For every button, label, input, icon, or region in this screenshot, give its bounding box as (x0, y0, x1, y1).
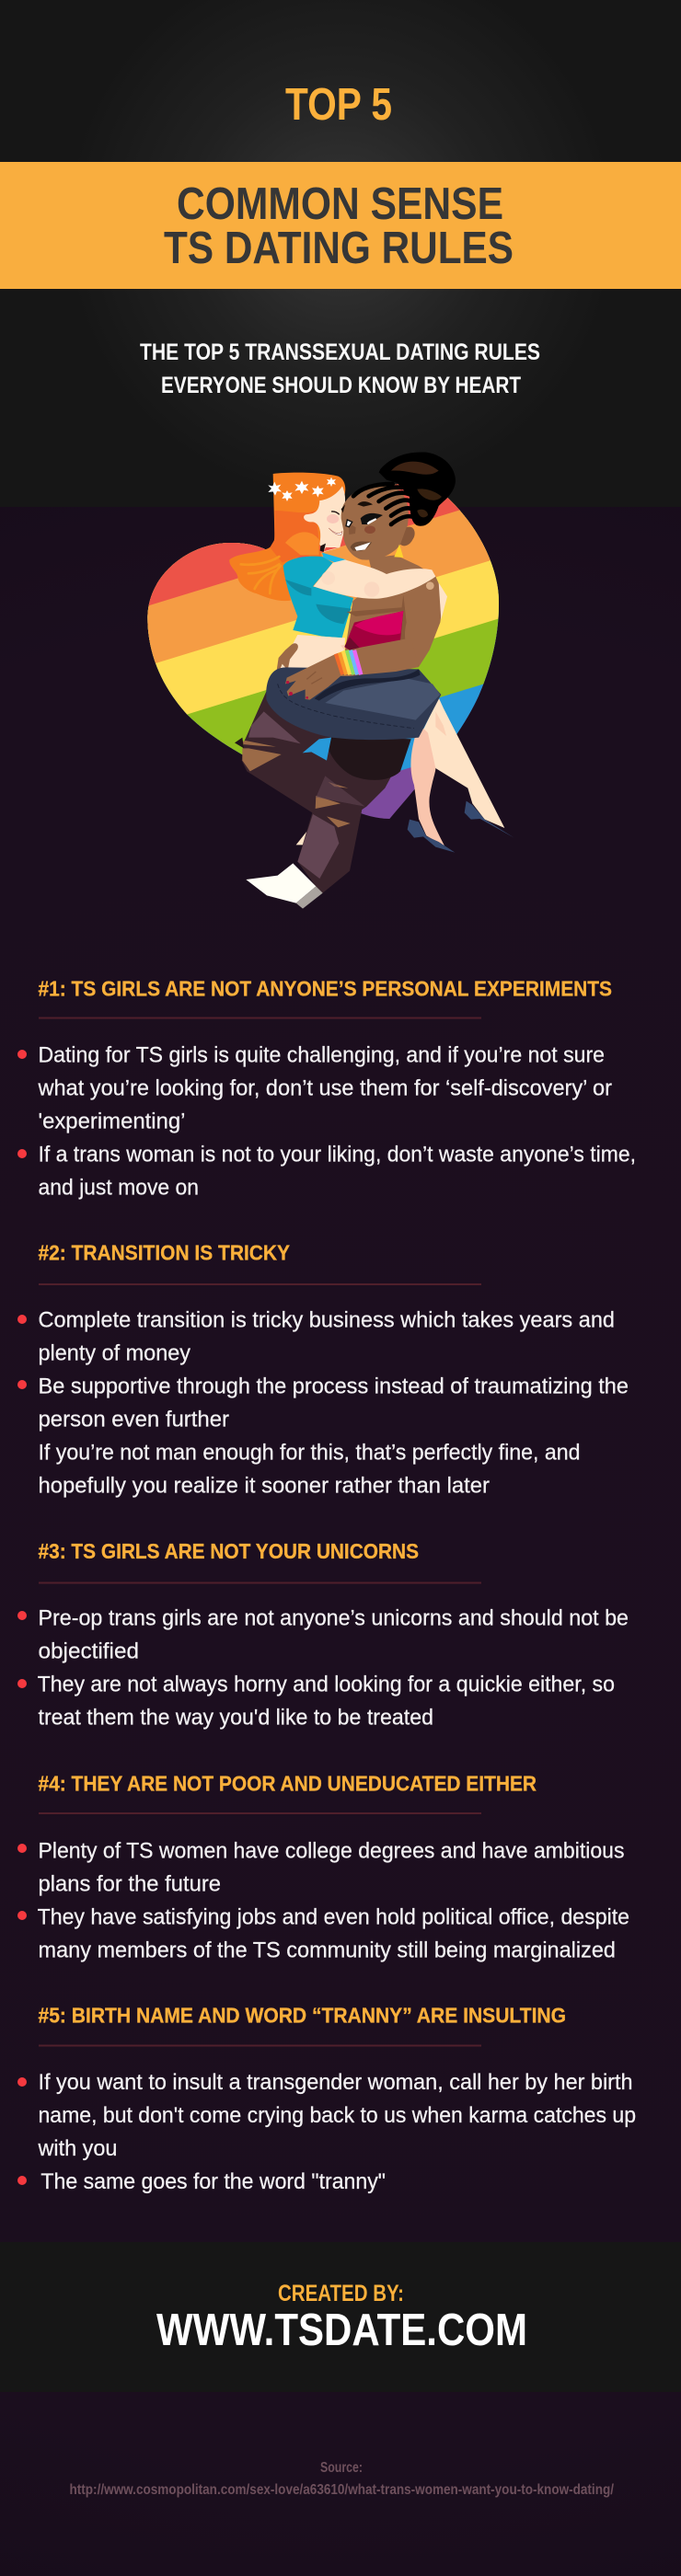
created by label: CREATED BY: (278, 2281, 404, 2306)
section 3 (17, 1539, 629, 1730)
section 5 (17, 2004, 636, 2194)
bullet list 2: hopefully you realize it sooner rather than later (39, 1474, 490, 1498)
magenta top (344, 611, 403, 650)
bullet list 2 (17, 1308, 629, 1498)
dark forearm and hand (285, 638, 419, 700)
bullet list 4 (17, 1838, 629, 1963)
bullet list 1: 'experimenting’ (39, 1110, 186, 1133)
bullet list 3: treat them the way you'd like to be treated (39, 1706, 433, 1730)
footer band (0, 2242, 681, 2392)
blue crop top (283, 553, 353, 638)
white ankle boot (246, 863, 323, 909)
heading: top 5: TOP 5 (285, 80, 392, 130)
bullet list 1: If a trans woman is not to your liking, don’t waste anyone’s time, (39, 1143, 636, 1167)
bullet list 1 (17, 1043, 636, 1200)
bullet list 4: plans for the future (39, 1871, 221, 1897)
heading 4: #4: THEY ARE NOT POOR AND UNEDUCATED EITHER (39, 1772, 537, 1796)
bullet list 5: The same goes for the word "tranny" (40, 2169, 386, 2194)
flower crown (268, 477, 336, 501)
peach midriff (279, 635, 345, 684)
pale legs and navy heels (296, 697, 514, 853)
title text (164, 179, 514, 273)
divider (39, 1283, 481, 1285)
bullet list 3: objectified (39, 1639, 139, 1663)
subtitle: EVERYONE SHOULD KNOW BY HEART (161, 373, 521, 398)
heading 5: #5: BIRTH NAME AND WORD “TRANNY” ARE INSULTING (39, 2004, 566, 2028)
divider (39, 2044, 481, 2046)
bullet list 5: name, but don't come crying back to us when karma catches up (39, 2103, 636, 2128)
title text: COMMON SENSE (177, 179, 503, 229)
dark skin eyes (341, 501, 383, 527)
dark skin torso and arm (345, 555, 444, 674)
rainbow heart (147, 484, 499, 819)
title banner (0, 162, 681, 289)
rainbow bracelet (336, 650, 361, 674)
fingers on waist (277, 643, 298, 672)
bullet list 2: If you’re not man enough for this, that’s perfectly fine, and (39, 1441, 580, 1465)
bullet list 4: They have satisfying jobs and even hold political office, despite (38, 1904, 629, 1930)
title text: TS DATING RULES (164, 224, 514, 273)
bullet list 1: and just move on (39, 1176, 199, 1200)
bullet list 3: They are not always horny and looking for a quickie either, so (38, 1673, 615, 1696)
header background (0, 0, 681, 507)
subtitle: THE TOP 5 TRANSSEXUAL DATING RULES (140, 339, 540, 365)
website: WWW.TSDATE.COM (156, 2306, 527, 2355)
source: Source: (320, 2460, 363, 2476)
heading 3: #3: TS GIRLS ARE NOT YOUR UNICORNS (39, 1539, 419, 1563)
torn dark jeans (235, 692, 411, 893)
heading 1: #1: TS GIRLS ARE NOT ANYONE’S PERSONAL EXPERIMENTS (39, 977, 612, 1001)
bullet list 1: what you’re looking for, don’t use them for ‘self-discovery’ or (38, 1076, 612, 1100)
source (70, 2460, 614, 2498)
heading 2: #2: TRANSITION IS TRICKY (39, 1240, 290, 1264)
section 1 (17, 977, 636, 1200)
bullet list 5: with you (38, 2136, 117, 2161)
bullet list 4: many members of the TS community still being marginalized (39, 1938, 616, 1963)
divider (39, 1582, 481, 1584)
red hair (229, 473, 345, 601)
section 2 (17, 1240, 629, 1498)
bullet list 5: If you want to insult a transgender woman, call her by her birth (39, 2070, 633, 2095)
divider (39, 1812, 481, 1814)
bullet list 1: Dating for TS girls is quite challenging, and if you’re not sure (39, 1043, 605, 1067)
bullet list 3 (17, 1606, 629, 1730)
redhead face (304, 486, 348, 552)
dark skin head and ear (341, 485, 415, 560)
bullet list 2: Complete transition is tricky business which takes years and (39, 1308, 615, 1332)
illustration: couple embracing over rainbow heart (147, 453, 514, 909)
bullet list 2: person even further (39, 1408, 229, 1432)
divider (39, 1018, 481, 1019)
bullet list 4: Plenty of TS women have college degrees and have ambitious (39, 1838, 624, 1864)
subtitle (140, 339, 540, 398)
bullet list 3: Pre-op trans girls are not anyone’s unicorns and should not be (39, 1606, 629, 1630)
arm around shoulder (314, 559, 447, 619)
section 4 (17, 1772, 629, 1963)
bullet list 5 (17, 2070, 636, 2194)
bullet list 2: plenty of money (39, 1341, 190, 1365)
bullet list 2: Be supportive through the process instead of traumatizing the (39, 1374, 629, 1398)
braids and hair bun (353, 452, 456, 526)
denim skirt (266, 667, 441, 740)
